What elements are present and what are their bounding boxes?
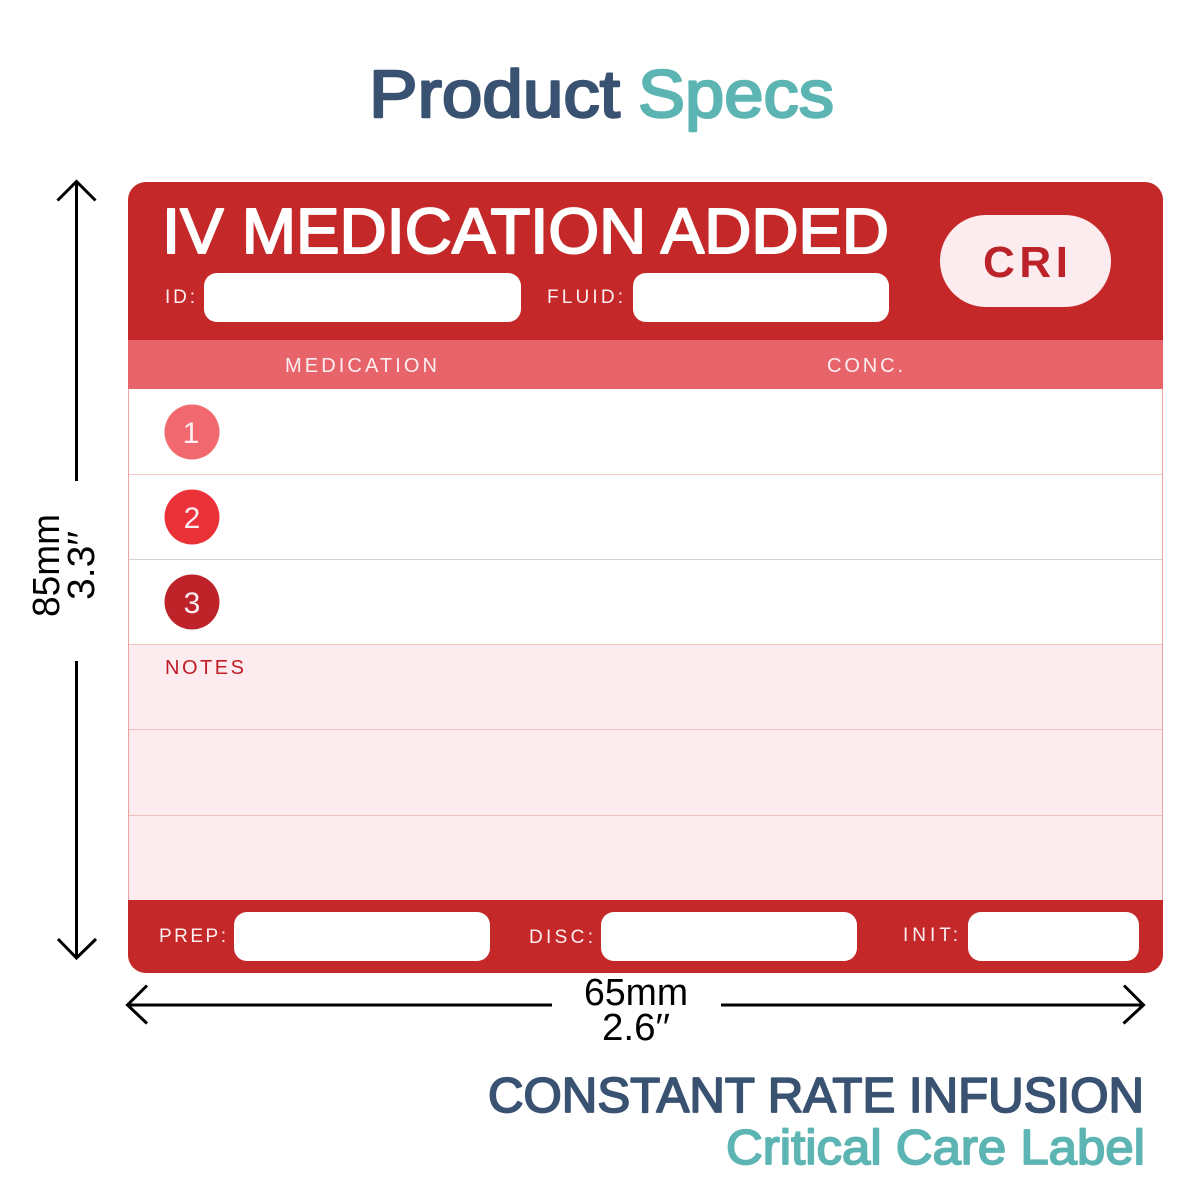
row number 2 [164,490,220,544]
field: ID input [204,273,521,322]
field label: fluid: FLUID: [547,287,623,308]
panel: label header [128,182,1163,340]
row number 1 [164,404,220,460]
arrow: width, left [128,986,552,1024]
arrow: height, lower [58,661,96,958]
table header bar [128,340,1163,389]
arrow: width, right [721,986,1144,1024]
row number 1: 1 [183,417,199,450]
dimension: width [584,972,688,1049]
column heading: concentration: CONC. [827,355,903,377]
dimension: width: 65mm [584,972,688,1014]
arrow: height, upper [58,182,96,481]
row dividers [129,474,1162,816]
column heading: medication: MEDICATION [285,355,437,377]
label body [128,182,1162,972]
heading: IV medication added: IV MEDICATION ADDED [162,195,889,267]
field: fluid input [633,273,889,322]
dimension: height [26,514,103,617]
field label: init: INIT: [903,925,958,946]
dimension: height: 3.3′′ [61,531,103,600]
product subtitle: Critical Care Label [726,1121,1145,1175]
title [369,57,834,132]
row number 3: 3 [184,587,200,620]
field: prep input [234,912,490,961]
dimension: width: 2.6′′ [602,1007,670,1049]
field: init input [968,912,1139,961]
title: Product [369,57,620,132]
field label: ID: ID: [165,287,195,308]
title: Specs [638,57,834,132]
field: disc input [601,912,857,961]
notes heading: NOTES [165,657,244,679]
panel: label [128,182,1163,973]
field label: prep: PREP: [159,926,226,947]
badge: CRI [940,215,1111,307]
row number 3 [164,574,220,630]
row number 2: 2 [184,502,200,535]
badge: CRI: CRI [983,238,1068,287]
dimension: height: 85mm [26,514,68,617]
panel: label footer [128,900,1163,973]
field label: disc: DISC: [529,927,593,948]
product name: CONSTANT RATE INFUSION [488,1069,1144,1123]
panel: notes background [129,645,1162,901]
